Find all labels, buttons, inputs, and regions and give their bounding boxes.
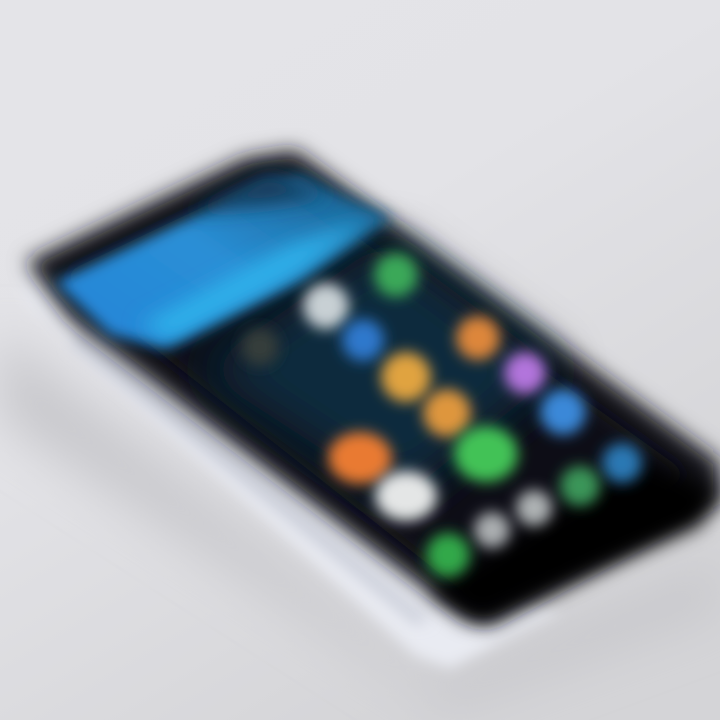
phone body side shading: [70, 325, 430, 625]
phone shadow: [0, 330, 720, 710]
black bottom dock: [430, 460, 720, 620]
icon: bright green: [454, 426, 518, 482]
icon: amber: [423, 389, 471, 437]
icon: green top: [374, 253, 418, 297]
icon: dark grey: [241, 328, 279, 366]
phone screen: [26, 150, 720, 625]
icon: blue: [342, 319, 384, 361]
icon: light blue: [540, 389, 586, 435]
dark teal tint: [200, 240, 560, 500]
icon: yellow: [381, 352, 431, 402]
icon: grey dock left: [474, 512, 510, 548]
icon: white: [303, 283, 349, 329]
screen core: [60, 175, 690, 605]
icon: orange right: [456, 316, 500, 360]
phone body edge: [20, 262, 560, 668]
blue wallpaper band: [55, 175, 392, 348]
app icons: [241, 253, 642, 577]
dark wave at top of wallpaper: [190, 172, 330, 212]
icon: grey dock: [516, 490, 552, 526]
icon: purple: [504, 352, 546, 394]
icon: green dock: [560, 466, 600, 506]
icon: orange large: [328, 432, 392, 484]
icon: white large: [375, 471, 437, 521]
icon: blue right: [602, 443, 642, 483]
icon: green bottom: [426, 533, 470, 577]
light blue wave highlight: [140, 218, 375, 340]
